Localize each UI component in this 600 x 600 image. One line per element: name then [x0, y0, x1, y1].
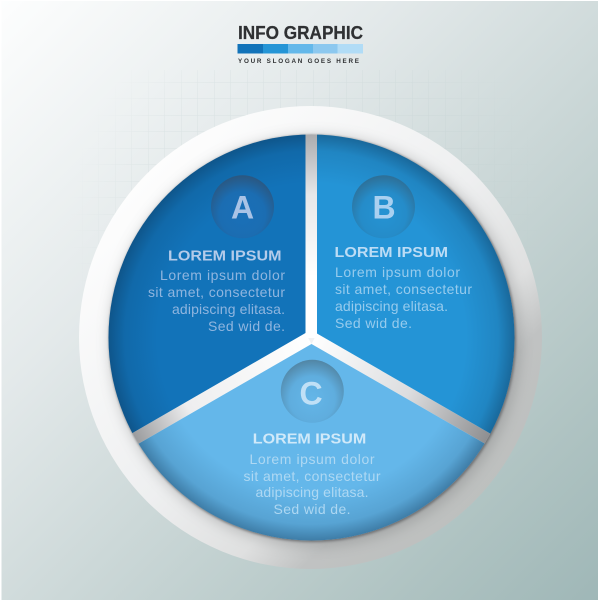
panel A: [108, 134, 306, 433]
badge C: C: [299, 376, 323, 412]
body text A: Lorem ipsum dolor: [160, 267, 285, 283]
panel C: [138, 344, 484, 540]
heading C: LOREM IPSUM: [253, 432, 366, 448]
inner disc shadow: [109, 135, 520, 546]
body text B: Lorem ipsum dolor: [335, 264, 460, 280]
body text B: sit amet, consectetur: [335, 281, 472, 297]
body text B: adipiscing elitasa.: [335, 298, 448, 314]
body text B: Sed wid de.: [335, 315, 412, 331]
colour bar: [238, 44, 363, 54]
body text A: sit amet, consectetur: [148, 284, 285, 300]
title block: [238, 22, 363, 65]
body text C: adipiscing elitasa.: [256, 484, 368, 500]
body text C: sit amet, consectetur: [244, 468, 381, 484]
badge C: [281, 360, 344, 423]
spokes: [100, 133, 530, 540]
body text A: Sed wid de.: [208, 318, 285, 334]
body text A: [148, 267, 285, 334]
heading B: LOREM IPSUM: [334, 245, 448, 261]
outer white ring: [79, 106, 542, 569]
slogan: YOUR SLOGAN GOES HERE: [238, 58, 359, 65]
body text A: adipiscing elitasa.: [172, 301, 285, 317]
body text C: Lorem ipsum dolor: [250, 451, 375, 467]
title text: INFO GRAPHIC: [238, 22, 363, 43]
panel B: [317, 134, 514, 434]
badge B: [352, 175, 415, 238]
heading A: LOREM IPSUM: [168, 248, 282, 264]
body text C: [244, 451, 381, 517]
badge A: [211, 175, 274, 238]
body text B: [335, 264, 472, 331]
body text C: Sed wid de.: [274, 501, 350, 517]
badge A: A: [231, 190, 254, 226]
badge B: B: [372, 190, 396, 226]
